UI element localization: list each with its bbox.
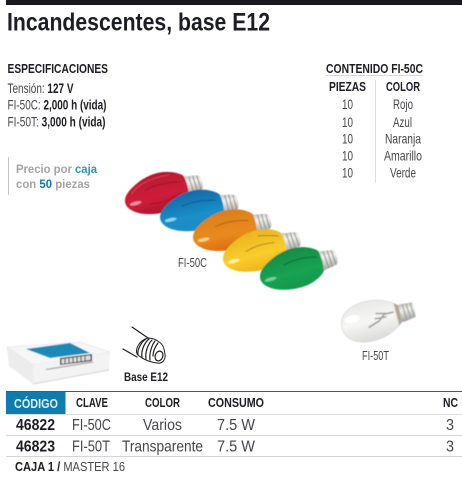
column: color: Azul [393, 114, 412, 130]
bulb: red [120, 163, 207, 221]
row: 46822: Varios [143, 417, 182, 434]
header cell: codigo [6, 392, 66, 414]
icon: E12 screw base [123, 327, 165, 363]
top black bar [6, 0, 462, 5]
header cells: CLAVE [76, 396, 108, 410]
callout: precio por caja: Precio por caja [16, 164, 98, 176]
column: color: Rojo [393, 96, 413, 112]
header cells: COLOR [145, 396, 180, 410]
spec: FI-50C life: FI-50C: 2,000 h (vida) [8, 98, 106, 112]
row: 46822: 7.5 W [217, 417, 256, 434]
row: 46822: FI-50C [72, 417, 111, 434]
row: 46823 [16, 438, 454, 456]
heading: contenido: CONTENIDO FI-50C [326, 61, 423, 76]
header cells: NC [443, 396, 458, 410]
image: coloured bulbs FI-50C [120, 163, 342, 297]
column: color: Verde [390, 164, 416, 180]
spec: tension: Tensión: 127 V [8, 81, 74, 96]
row: 46823: Transparente [122, 438, 203, 456]
image: product box [7, 342, 110, 384]
bulb: blue [156, 182, 242, 238]
bulb: green [255, 237, 342, 297]
callout: precio por caja [8, 157, 98, 195]
footer note: caja / master: CAJA 1 / MASTER 16 [15, 459, 125, 474]
callout: precio por caja: con 50 piezas [16, 179, 90, 191]
row: 46823: 3 [446, 438, 454, 456]
column: piezas: 10 [342, 114, 353, 130]
panel: contenido FI-50C table [326, 61, 423, 183]
heading: especificaciones: ESPECIFICACIONES [8, 61, 108, 76]
label: Base E12: Base E12 [124, 370, 168, 384]
column: color: Naranja [385, 130, 421, 146]
column headers: PIEZAS [329, 79, 366, 94]
row: 46822: 3 [446, 417, 454, 434]
column: piezas: 10 [342, 130, 353, 146]
title: Incandescentes, base E12 [7, 8, 270, 36]
column: piezas [342, 96, 353, 180]
row: 46822 [16, 417, 454, 434]
column: color: Amarillo [384, 148, 422, 164]
column: piezas: 10 [342, 164, 353, 180]
header cell: codigo: CÓDIGO [14, 396, 58, 411]
row: 46823: 46823 [16, 438, 55, 456]
column: color [384, 96, 422, 180]
bulb: orange [189, 201, 275, 258]
header cells [76, 396, 458, 410]
label: FI-50T: FI-50T [362, 349, 389, 363]
panel: especificaciones [8, 61, 108, 130]
column headers: COLOR [386, 79, 420, 94]
image: clear bulb FI-50T [337, 291, 419, 347]
bulb: yellow [218, 219, 305, 279]
row: 46823: 7.5 W [217, 438, 256, 456]
column: piezas: 10 [342, 96, 353, 112]
column headers [329, 79, 420, 94]
label: FI-50C: FI-50C [178, 256, 207, 270]
column: piezas: 10 [342, 148, 353, 164]
spec: FI-50T life: FI-50T: 3,000 h (vida) [8, 114, 106, 130]
row: 46823: FI-50T [72, 438, 110, 456]
row: 46822: 46822 [16, 417, 55, 434]
header cells: CONSUMO [208, 396, 264, 410]
table: product codes [6, 391, 462, 457]
